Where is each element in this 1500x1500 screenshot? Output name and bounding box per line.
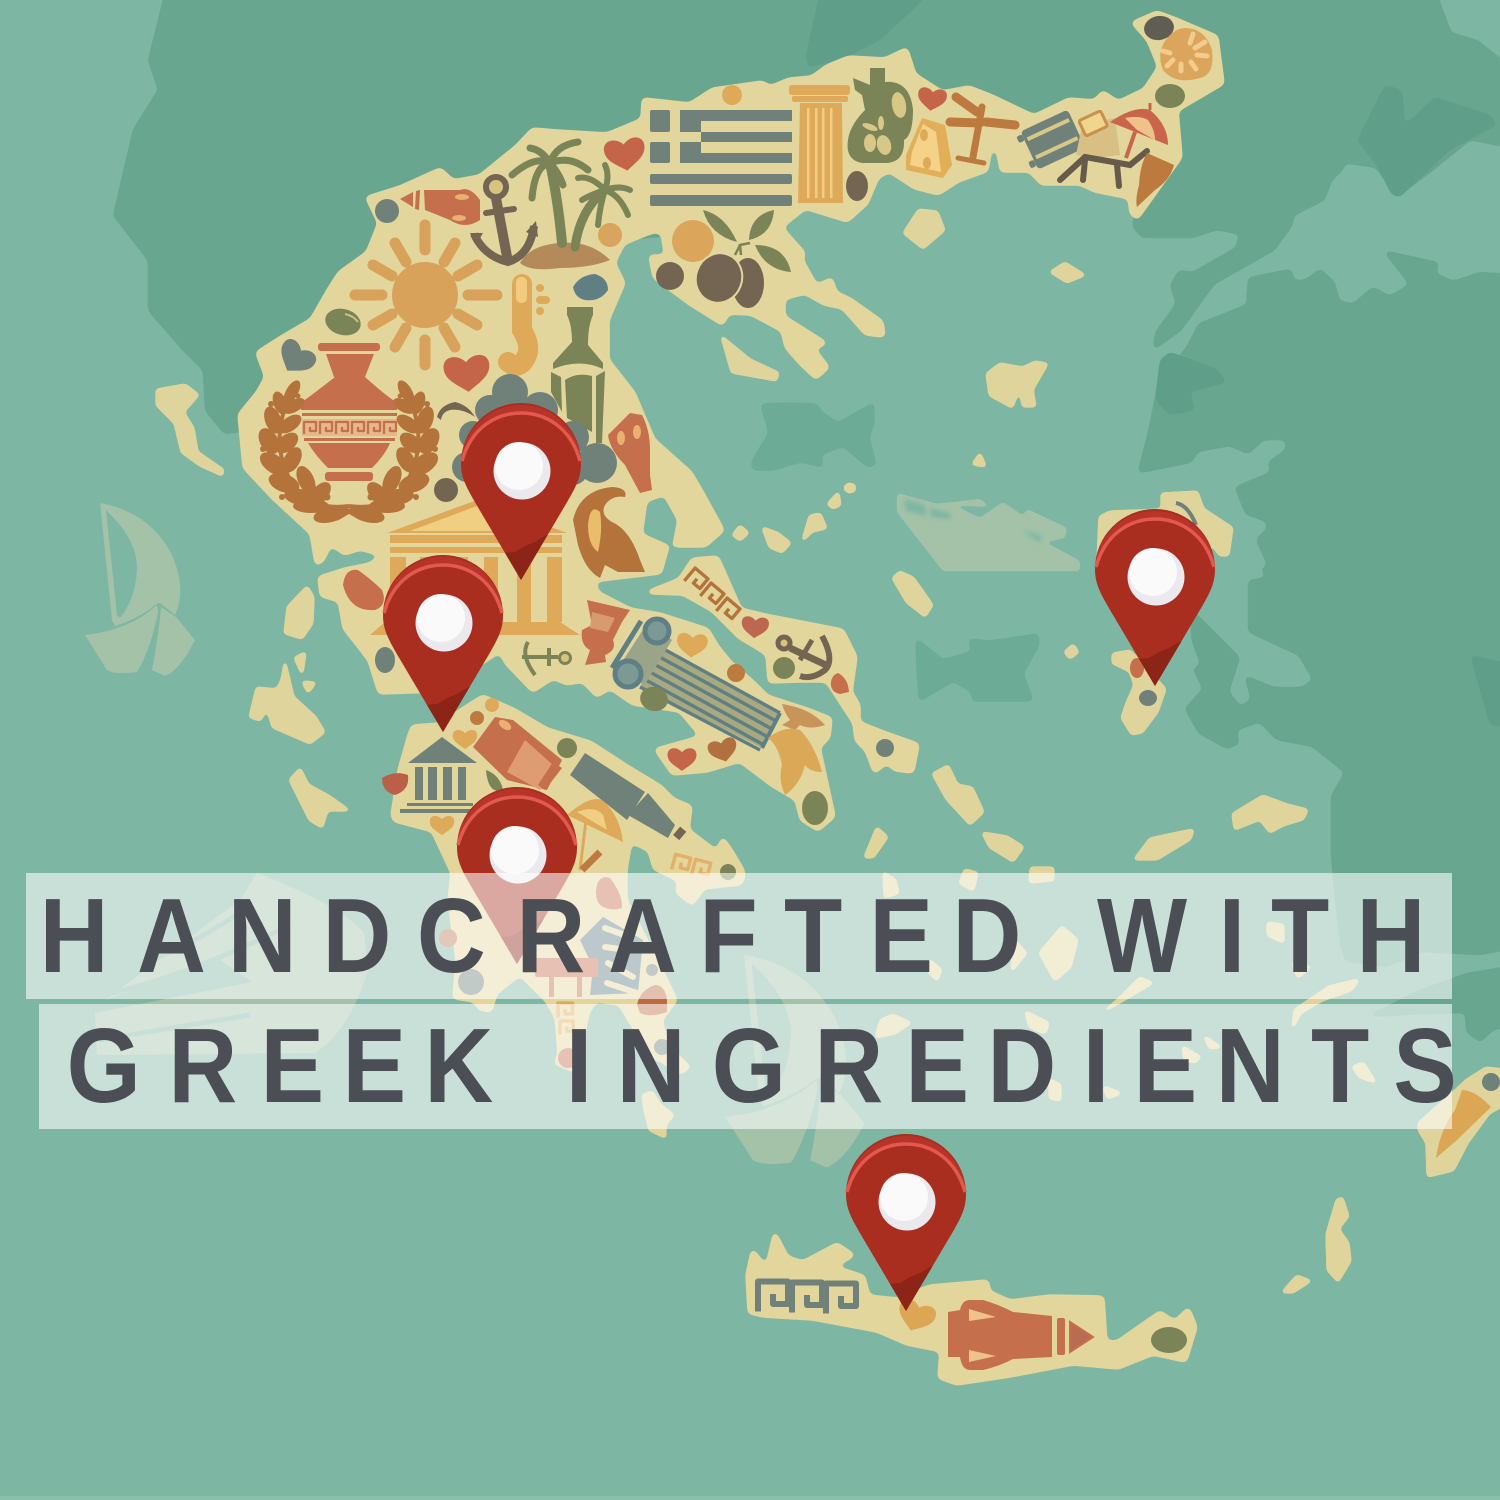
icon: central symbols [343,568,894,825]
icon: island symbols [1130,503,1500,1158]
icon: heart [916,86,948,113]
icon: brown anchor [778,636,829,677]
icon: green bottle [551,307,605,443]
icon: brown dot [470,711,484,725]
icon: olive [1151,1327,1187,1353]
icon: olive [637,684,671,714]
icon: blue hand [580,917,643,995]
map: Peloponnese [393,697,743,1072]
icon: Peloponnese symbols [382,698,736,1068]
icon: orange slice [1160,28,1212,80]
icon: olive [322,305,364,339]
icon: red heart [603,136,648,173]
icon: stem [437,402,475,420]
title: first line: HANDCRAFTED WITH [40,877,1425,995]
land: south-east coast [1373,966,1500,1040]
icon: helmet [573,487,645,578]
ship: upper ghost [897,493,1080,571]
icon: amphora right [608,413,652,493]
icon: red heart centre [443,354,492,394]
map: Euboea [650,558,917,771]
icon: grey olive [375,647,395,673]
land: northern coast [115,0,1500,432]
footer: bottom edge strip [0,1496,1500,1500]
sailboat: centre ghost [725,955,865,1167]
ship: lower ghost [95,873,368,1055]
icon: orange temple [370,500,580,635]
icon: red-brown dot [439,929,457,947]
icon: meander [672,854,711,878]
land: surrounding coastline [115,0,1500,1040]
icon: seahorse [508,277,550,366]
icon: heart [740,616,769,639]
icon: heart [676,632,708,659]
icon: red marker on Chios [1130,658,1144,678]
icon: northern east symbols [650,14,1212,309]
icon: tan patch [1076,118,1120,158]
icon: orange umbrella [567,799,623,870]
map: Greek landmass [240,13,1222,1383]
icon: orange dot [598,223,622,247]
icon: Rhodes carrot [1436,1090,1491,1158]
icon: tan dish [782,704,825,730]
icon: deck chair [1060,151,1147,186]
banner: second line background [39,1004,1452,1129]
map pin: central north [461,403,581,583]
icon: meander [758,1282,856,1314]
icon: beach umbrella [1110,103,1168,158]
icon: brown dot [727,664,745,682]
icon: laurel wreath [254,378,444,526]
icon: sun [355,225,497,365]
icon: orange dot [722,85,742,105]
icon: palm island [512,142,630,269]
icon: hook on Lesbos [1176,503,1196,525]
sailboat: left ghost [85,503,195,676]
icon: green olive [1155,84,1185,108]
icon: amphora on its side [400,189,480,225]
icon: grape bunch [452,374,617,485]
icon: olive [773,657,795,679]
icon: heart [453,730,477,749]
icon: red drop [831,673,849,694]
icon: Rhodes dot [1482,1073,1500,1091]
icon: suitcase [1015,110,1085,172]
icon: Greek flag [650,110,792,206]
icon: northern coast symbols [272,136,652,578]
land: eastern coast [1140,253,1500,965]
icon: black olive [1142,14,1176,42]
icon: green dot [720,864,736,880]
icon: meander [558,1003,573,1034]
icon: grey temple [400,737,477,813]
map pin: Crete [846,1134,966,1314]
icon: green anchor [522,642,570,675]
title: second line: GREEK INGREDIENTS [67,1007,1457,1125]
icon: cheese [906,118,952,178]
icon: olive [802,791,828,825]
icon: heart [706,736,740,765]
icon: green dot [557,738,577,758]
icon: orange dot [485,698,499,712]
icon: book [1079,111,1108,136]
icon: heart [668,748,696,771]
icon: grey bottle [570,753,686,840]
map pin: west [383,555,503,735]
map pin: Peloponnese [457,787,577,967]
fish: lower [917,635,1038,700]
icon: olive oil jug [848,68,913,163]
fish: upper [753,404,875,469]
icon: dark olive [846,171,868,201]
icon: red bean [343,570,384,610]
icon: heart [430,816,454,835]
icon: lounge paddle [950,97,1015,163]
land: ghost shapes [806,0,1500,730]
icon: olive branch [656,210,791,309]
map pin: east island [1095,509,1215,689]
icon: anchor [470,177,538,262]
icon: red dot [558,1048,578,1068]
icon: green leaf [486,770,503,791]
icon: krater [582,600,630,665]
icon: amphora [948,1300,1093,1370]
map: mainland Greece [240,13,1222,829]
icon: carrot [1136,153,1174,207]
map: islands [157,210,1500,1292]
icon: column [789,85,850,203]
map: Crete [748,1235,1195,1383]
icon: orange helmet [768,729,822,795]
icon: ionic column [612,619,780,750]
icon: blue blob [573,274,608,300]
icon: red table [535,958,598,997]
icon: Crete symbols [758,1282,1187,1370]
icon: grey dot on Chios [1139,690,1157,706]
icon: brown dot [434,478,458,502]
icon: red fruit [382,773,408,795]
icon: grey dot [876,739,894,757]
icon: grey heart [272,336,319,381]
icon: meander [684,568,740,622]
icon: scroll [473,717,562,790]
icon: grey dot [646,964,658,976]
icon: Greek vase [301,343,397,481]
banner: first line background [26,873,1452,999]
icon: red-brown blob [637,985,667,1015]
icon: grey dot [375,199,399,223]
icon: grey olive [458,969,484,995]
icon: heart [893,1297,938,1337]
icon: red bean [596,877,622,909]
icon: grey dot [654,1039,670,1055]
